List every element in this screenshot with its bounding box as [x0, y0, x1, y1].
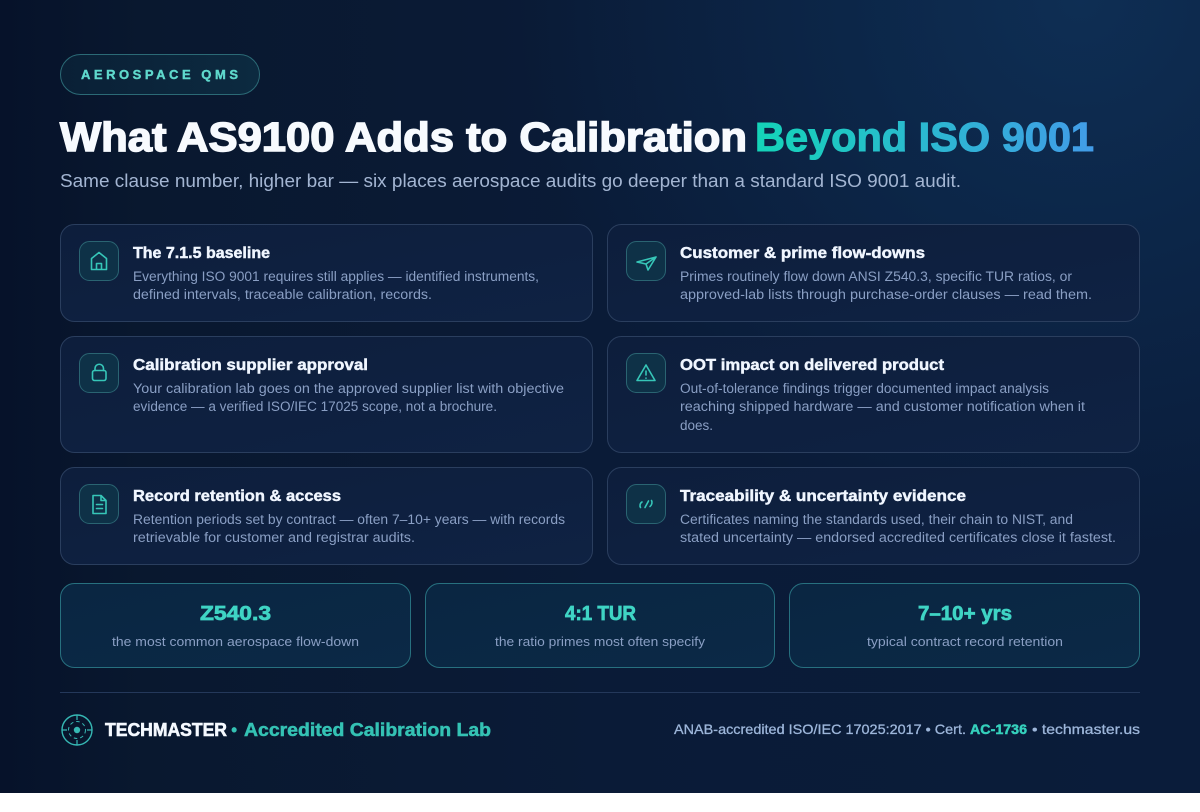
- title: [60, 114, 1094, 160]
- panel: OOT impact on delivered product: reaching shipped hardware — and customer notification when it: [680, 399, 1085, 414]
- footer accreditation: • techmaster.us: [1032, 721, 1140, 737]
- panel: record retention and access: retrievable for customer and registrar audits.: [133, 530, 415, 545]
- panel: OOT impact on delivered product: Out-of-tolerance findings trigger documented impact analysis: [680, 381, 1049, 396]
- panel: calibration supplier approval: Your calibration lab goes on the approved supplier list with objective: [133, 381, 564, 396]
- title: What AS9100 Adds to Calibration: [60, 114, 747, 160]
- panel: the 7.1.5 baseline: Everything ISO 9001 requires still applies — identified instruments,: [133, 269, 539, 284]
- title: Beyond ISO 9001: [755, 114, 1094, 160]
- icon: warning triangle: [626, 354, 666, 392]
- panel: traceability and uncertainty evidence: [608, 468, 1140, 564]
- panel: customer and prime flow-downs: approved-lab lists through purchase-order clauses — read them.: [680, 287, 1092, 302]
- panel: OOT impact on delivered product: [608, 336, 1140, 452]
- icon: chain link: [626, 484, 666, 524]
- panel: the 7.1.5 baseline: The 7.1.5 baseline: [133, 245, 270, 262]
- stat: 4:1 TUR: [426, 584, 774, 668]
- footer accreditation: [674, 721, 1140, 737]
- footer logo: target icon: [62, 715, 92, 745]
- stat: Z540.3: Z540.3: [200, 603, 271, 625]
- panel: customer and prime flow-downs: Customer & prime flow-downs: [680, 245, 925, 262]
- stat: 7–10+ yrs: [790, 584, 1140, 668]
- panel: traceability and uncertainty evidence: Traceability & uncertainty evidence: [680, 488, 966, 505]
- panel: calibration supplier approval: [60, 336, 592, 452]
- panel: record retention and access: [60, 468, 592, 564]
- subtitle: Same clause number, higher bar — six places aerospace audits go deeper than a standard ISO 9001 audit.: [60, 171, 961, 191]
- panel: traceability and uncertainty evidence: stated uncertainty — endorsed accredited certificates close it fastest.: [680, 530, 1116, 545]
- stat: 4:1 TUR: the ratio primes most often specify: [495, 634, 706, 649]
- panel: OOT impact on delivered product: OOT impact on delivered product: [680, 357, 945, 374]
- footer accreditation: ANAB-accredited ISO/IEC 17025:2017 • Cert.: [674, 721, 966, 737]
- icon: paper plane: [626, 242, 666, 280]
- panel: record retention and access: Record retention & access: [133, 488, 341, 505]
- icon: house: [80, 242, 118, 280]
- footer brand: TECHMASTER: [105, 720, 227, 740]
- panel: customer and prime flow-downs: [608, 224, 1140, 322]
- footer brand: •: [231, 720, 237, 740]
- stat: Z540.3: [60, 584, 410, 668]
- icon: document: [80, 484, 118, 524]
- stat: Z540.3: the most common aerospace flow-down: [112, 634, 359, 649]
- panel: customer and prime flow-downs: Primes routinely flow down ANSI Z540.3, specific TUR ratios, or: [680, 269, 1073, 284]
- badge: aerospace QMS: [60, 54, 260, 94]
- footer accreditation: AC-1736: [970, 721, 1027, 737]
- stat: 7–10+ yrs: 7–10+ yrs: [918, 603, 1012, 625]
- badge: aerospace QMS: AEROSPACE QMS: [81, 67, 238, 82]
- panel: record retention and access: Retention periods set by contract — often 7–10+ years — with records: [133, 512, 565, 527]
- stat: 4:1 TUR: 4:1 TUR: [565, 603, 637, 625]
- stat: 7–10+ yrs: typical contract record retention: [867, 634, 1063, 649]
- footer brand: Accredited Calibration Lab: [244, 720, 491, 740]
- footer brand: [105, 720, 491, 740]
- panel: the 7.1.5 baseline: [60, 224, 592, 322]
- panel: traceability and uncertainty evidence: Certificates naming the standards used, their chain to NIST, and: [680, 512, 1073, 527]
- panel: OOT impact on delivered product: does.: [680, 418, 713, 433]
- panel: calibration supplier approval: Calibration supplier approval: [133, 357, 368, 374]
- panel: the 7.1.5 baseline: defined intervals, traceable calibration, records.: [133, 287, 432, 302]
- panel: calibration supplier approval: evidence — a verified ISO/IEC 17025 scope, not a brochure.: [133, 399, 497, 414]
- icon: padlock: [80, 354, 118, 392]
